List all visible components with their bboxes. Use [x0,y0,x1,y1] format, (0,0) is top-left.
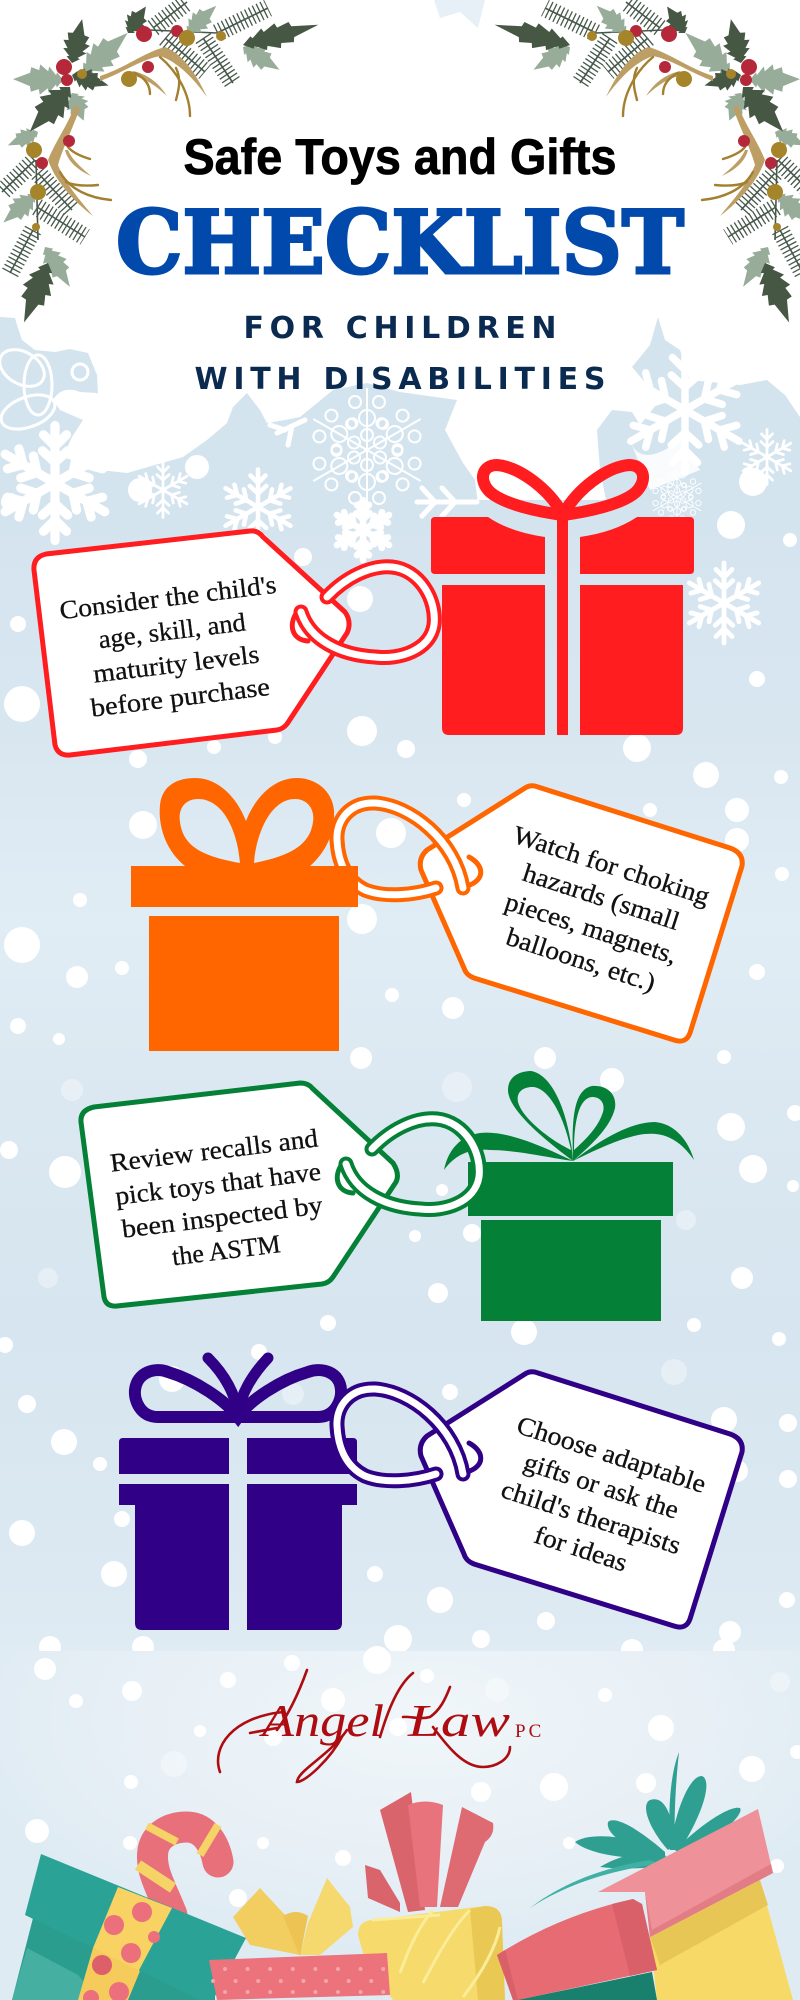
text: tip 3: pick toys that have [114,1157,323,1211]
text: tip 1: maturity levels [91,639,261,689]
yellow bow [233,1878,353,1956]
text: tip 4: gifts or ask the [520,1447,682,1525]
text: tip 2: balloons, etc.) [503,922,659,997]
text: tip 2: pieces, magnets, [501,887,681,970]
panel: tip 1 red gift and tag [34,465,694,755]
icon: purple gift [119,1358,357,1630]
logo: Angel Law PC: PC [515,1721,544,1742]
text: tip 3: the ASTM [170,1229,282,1271]
logo: Angel Law PC [218,1670,544,1782]
text: tip 2 [479,820,713,1005]
logo: Angel Law PC: Angel [259,1695,384,1746]
decoration: holly top right [491,0,800,328]
bottom snow dots [25,1646,800,1907]
panel: tip 2 orange gift and tag [131,778,742,1051]
text: tip 3: been inspected by [120,1190,324,1244]
panel: tip 3 green gift and tag [81,1071,694,1321]
tag: orange [420,786,742,1041]
pink box [209,1953,390,2000]
logo: Angel Law PC: Law [407,1695,510,1746]
icon: red gift [431,465,694,735]
text: tip 4: Choose adaptable [513,1410,710,1499]
tag: red [34,531,349,755]
subtitle line 2: WITH DISABILITIES [194,362,606,397]
tag string: green [337,1119,479,1210]
tag string: orange [337,803,481,895]
text: tip 1: age, skill, and [97,607,247,654]
teal box [12,1854,246,2000]
text: tip 2: Watch for choking [509,820,713,911]
tag string: red [292,567,434,658]
subtitle line 1: FOR CHILDREN [244,311,556,346]
teal bow [530,1752,741,1908]
decoration: holly top left [0,0,322,328]
text: tip 4: child's therapists [498,1475,684,1560]
pink bow [365,1792,493,1912]
text: tip 4: for ideas [531,1520,631,1577]
pink large lid [598,1809,773,1937]
tag: green [81,1083,397,1306]
title: Safe Toys and Gifts [184,129,616,185]
candy cane [138,1825,218,1915]
text: tip 2: hazards (small [519,858,683,936]
icon: green gift [444,1071,694,1321]
text: tip 1: before purchase [89,672,271,723]
bottom background band [0,1651,800,2000]
yellow cylinder [358,1906,505,2000]
illustration: gifts at bottom [12,1752,793,2000]
tag: purple [420,1372,742,1627]
text: tip 4 [483,1410,710,1593]
text: tip 3: Review recalls and [108,1123,319,1178]
icon: orange gift [131,778,358,1051]
red lid box [497,1899,657,2000]
text: tip 1 [58,570,290,725]
yellow tall box [650,1880,793,2000]
snow dots [0,468,800,1661]
panel: tip 4 purple gift and tag [119,1358,742,1630]
text: tip 1: Consider the child's [58,570,278,625]
heading: checklist: CHECKLIST [116,191,684,294]
tag string: purple [337,1389,481,1481]
snowflakes [0,342,794,643]
text: tip 3 [108,1123,332,1277]
